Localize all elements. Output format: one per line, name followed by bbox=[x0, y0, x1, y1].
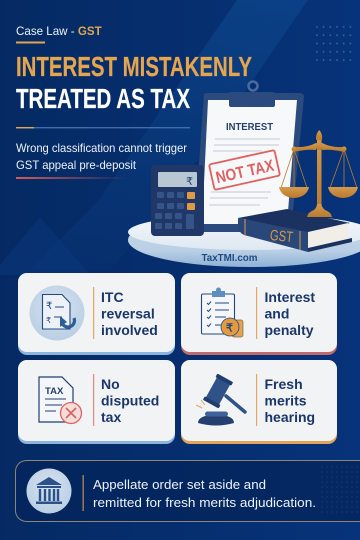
text: and bbox=[264, 306, 289, 322]
icon: tax document with cross: TAX bbox=[45, 386, 64, 397]
book label: GST: GST bbox=[269, 227, 294, 246]
icon: ITC reversal document: ₹ bbox=[46, 316, 51, 325]
text: penalty bbox=[264, 322, 314, 338]
text bbox=[101, 289, 158, 338]
icon: ITC reversal document bbox=[30, 286, 84, 340]
icon: clipboard with NOT TAX stamp bbox=[194, 82, 304, 232]
subtitle: Wrong classification cannot trigger bbox=[16, 141, 187, 155]
text: ITC bbox=[101, 289, 124, 305]
icon: scales of justice bbox=[279, 130, 358, 217]
icon: calculator bbox=[151, 165, 204, 236]
text bbox=[101, 376, 159, 425]
icon: ITC reversal document: ₹ bbox=[46, 301, 52, 312]
text: merits bbox=[264, 392, 307, 408]
text: Fresh bbox=[264, 376, 303, 392]
text: remitted for fresh merits adjudication. bbox=[93, 495, 316, 510]
card: Fresh merits hearing bbox=[181, 360, 337, 444]
text bbox=[93, 477, 316, 510]
icon: gavel bbox=[196, 374, 245, 426]
platform bbox=[128, 213, 360, 267]
stamp: NOT TAX: NOT TAX bbox=[214, 157, 276, 187]
icon: tax document with cross bbox=[39, 377, 82, 424]
icon: checklist with rupee coin: ₹ bbox=[226, 322, 233, 334]
text: No bbox=[101, 376, 120, 392]
subtitle: GST appeal pre-deposit bbox=[16, 158, 137, 172]
subtitle bbox=[16, 141, 187, 172]
icon: checklist with rupee coin bbox=[202, 288, 243, 337]
title bbox=[16, 51, 252, 114]
text: tax bbox=[101, 409, 121, 425]
label: TaxTMI.com: TaxTMI.com bbox=[202, 253, 258, 264]
text: Interest bbox=[264, 289, 315, 305]
text bbox=[264, 289, 315, 338]
card: ITC reversal involved bbox=[18, 273, 175, 355]
text: involved bbox=[101, 322, 158, 338]
text: disputed bbox=[101, 392, 159, 408]
divider bbox=[16, 127, 190, 128]
card: Interest and penalty bbox=[181, 273, 337, 355]
heading: INTEREST: INTEREST bbox=[226, 121, 274, 133]
text bbox=[264, 376, 315, 425]
eyebrow: Case Law - GST: Case Law - GST bbox=[16, 25, 102, 38]
text: reversal bbox=[101, 306, 155, 322]
icon: GST book bbox=[238, 209, 352, 252]
icon: calculator: ₹ bbox=[186, 176, 193, 188]
title: INTEREST MISTAKENLY bbox=[16, 51, 252, 82]
title: TREATED AS TAX bbox=[16, 83, 190, 114]
text: Appellate order set aside and bbox=[93, 477, 266, 492]
text: hearing bbox=[264, 409, 315, 425]
panel: outcome bbox=[16, 460, 360, 522]
card: No disputed tax bbox=[18, 360, 175, 444]
icon: court building bbox=[26, 468, 72, 514]
